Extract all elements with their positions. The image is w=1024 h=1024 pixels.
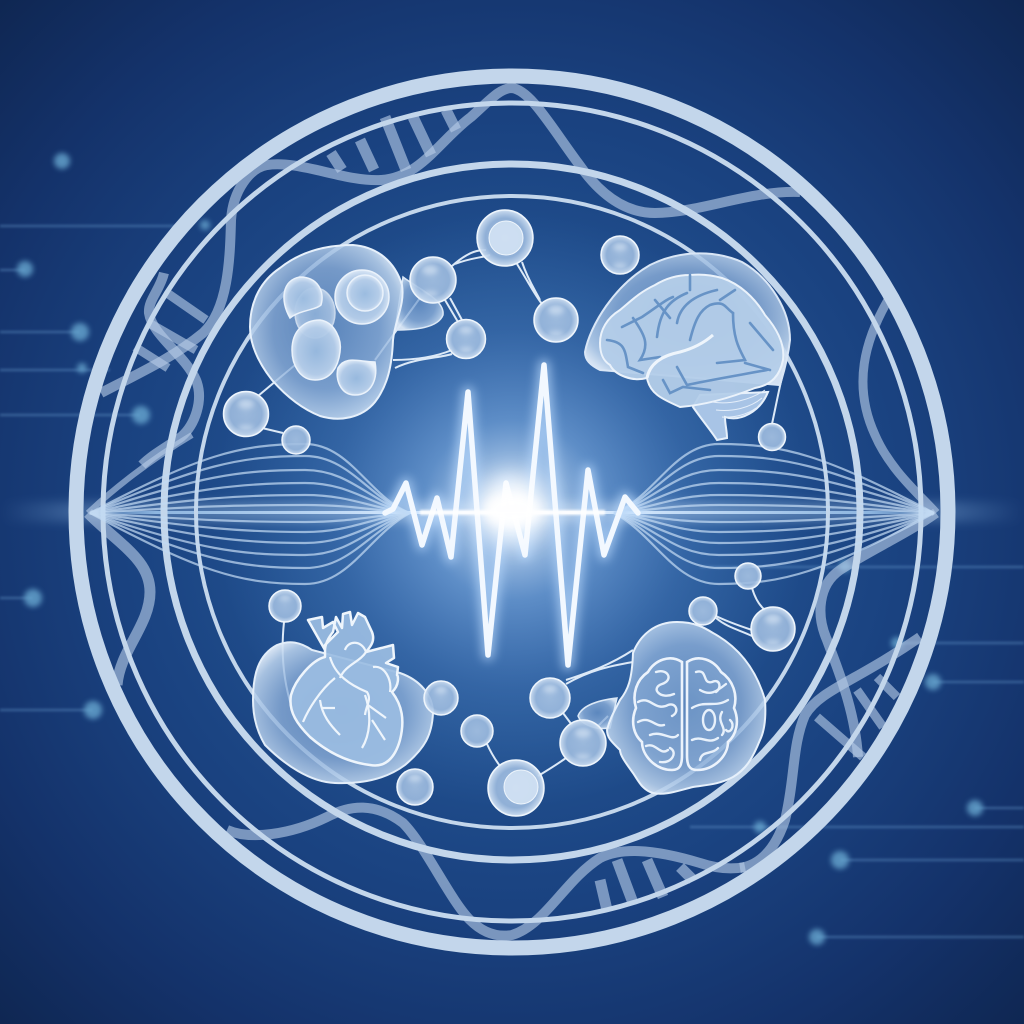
DNA: right: [740, 300, 936, 868]
horizontal light beam: [0, 502, 1024, 522]
heart vessels: [303, 643, 390, 748]
organ: cell cluster, top left: [250, 245, 443, 419]
translucent shell: [253, 642, 433, 783]
concentric rings: [76, 76, 948, 948]
molecule highlights: [238, 221, 781, 804]
wave lines: right: [614, 444, 934, 584]
small brain: [633, 658, 737, 770]
molecules: [224, 210, 795, 816]
organ: brain in cell, bottom right: [578, 622, 765, 794]
cell body: [250, 245, 403, 419]
temporal lobe highlight: [647, 335, 713, 378]
translucent shell: [585, 253, 790, 385]
heartbeat pulse line: [385, 365, 638, 665]
heartbeat pulse glow: [385, 365, 638, 665]
organ: heart, bottom left: [253, 612, 433, 783]
DNA: bottom: [227, 808, 745, 936]
DNA strands: [88, 88, 936, 936]
cerebellum lines: [712, 390, 765, 417]
molecule connectors: [258, 250, 784, 776]
sulci: [607, 275, 773, 393]
inner cells: [284, 270, 389, 395]
cerebrum: [600, 275, 783, 407]
cerebellum and stem: [693, 392, 768, 440]
cell body: [607, 622, 765, 794]
central flare: [420, 476, 605, 540]
background data lines and nodes: [0, 153, 1024, 945]
side lobe: [578, 698, 617, 728]
DNA: top: [101, 88, 800, 393]
DNA: left: [88, 273, 206, 685]
central glow: [212, 210, 812, 810]
heart body: [290, 612, 402, 766]
organ: brain, top right: [585, 253, 790, 440]
side lobe: [395, 277, 443, 330]
wave lines: left: [90, 444, 410, 584]
